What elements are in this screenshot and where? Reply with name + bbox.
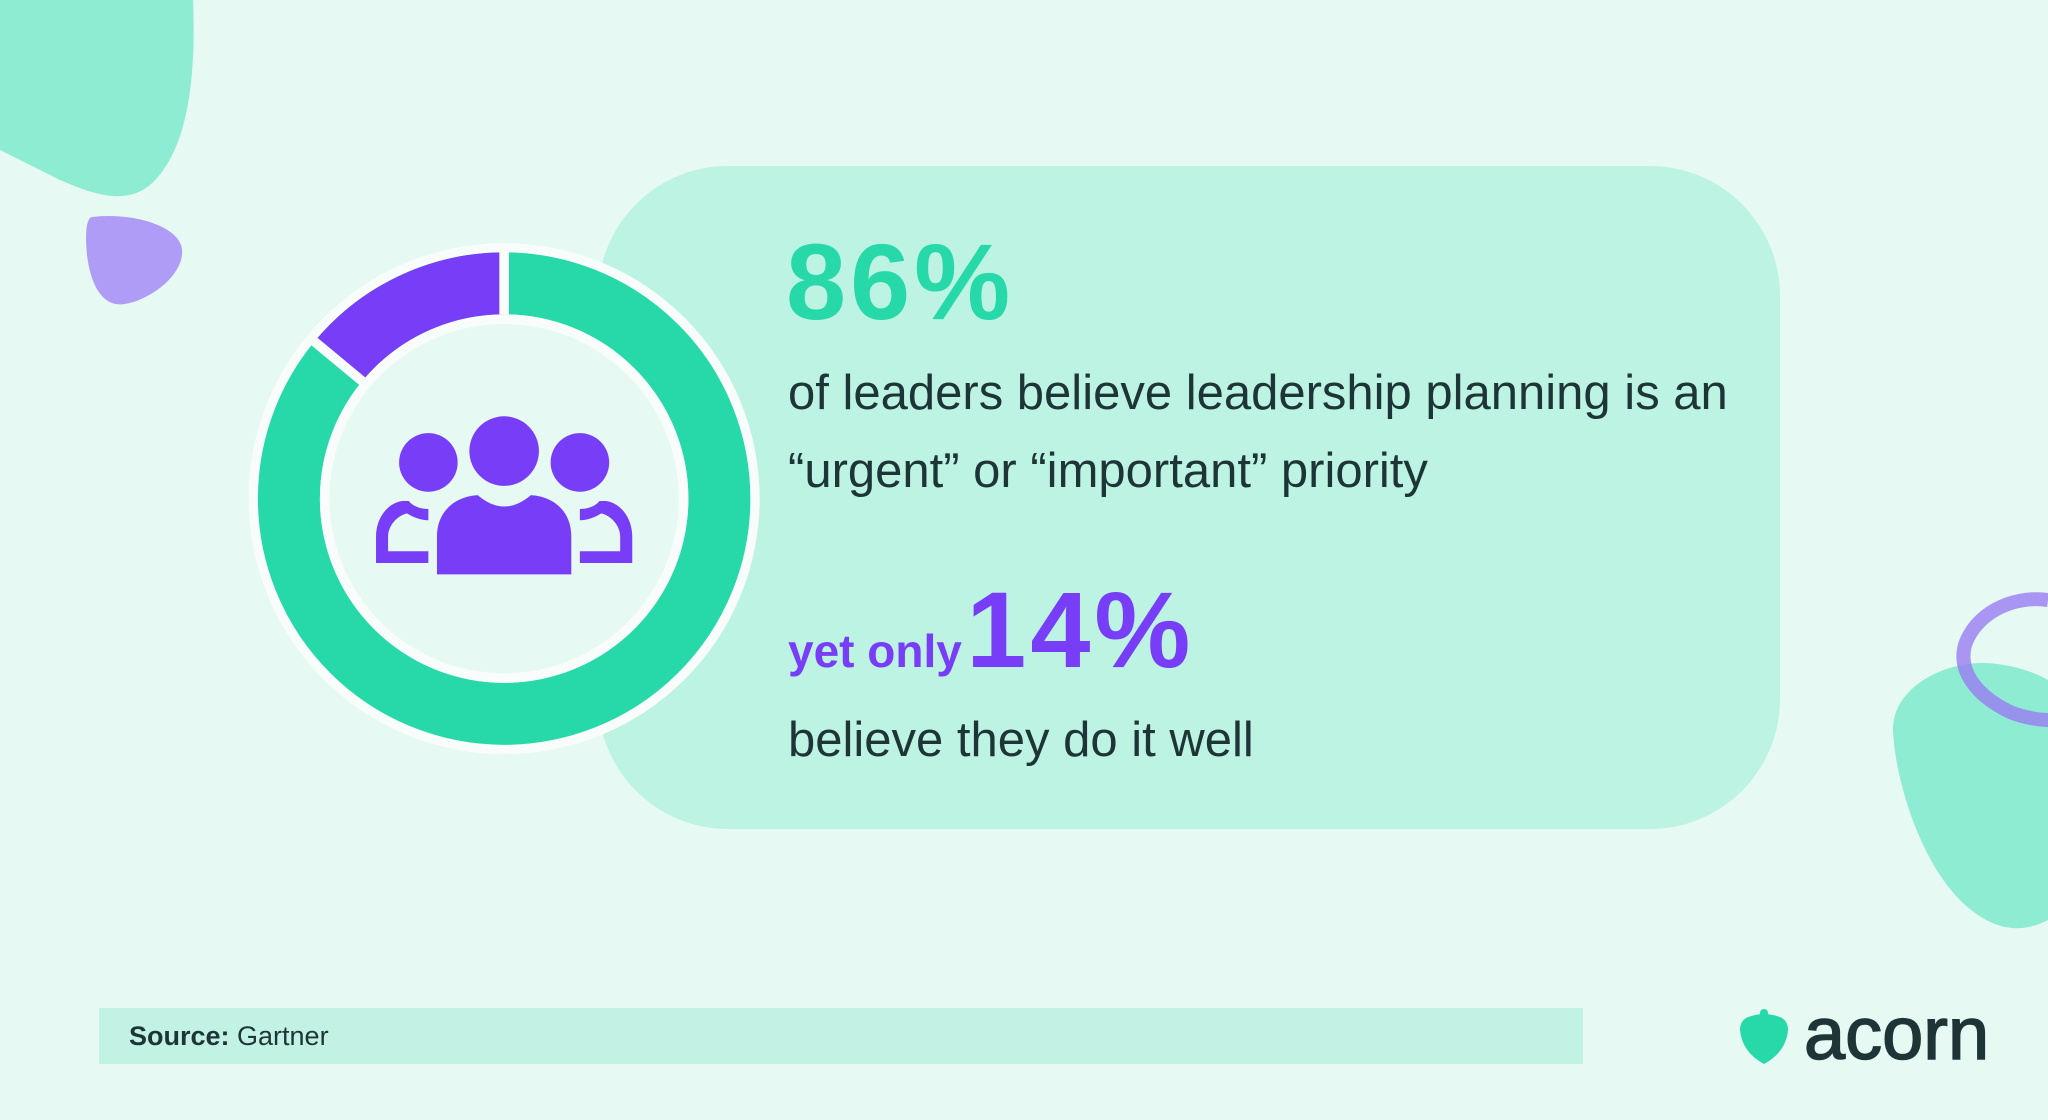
text: acorn: acorn bbox=[1804, 992, 1989, 1075]
logo: acorn bbox=[1740, 992, 1989, 1075]
blob: right green bbox=[1893, 663, 2048, 928]
donut chart bbox=[248, 243, 760, 754]
stat: yet only 14%: yet only 14% bbox=[788, 569, 1194, 690]
blob: top-left green bbox=[0, 0, 194, 196]
text: 14% description: believe they do it well bbox=[788, 713, 1254, 767]
text: 86% description: “urgent” or “important” priority bbox=[788, 444, 1428, 498]
source bar bbox=[99, 1008, 1583, 1064]
blob: purple bbox=[86, 216, 182, 304]
stat: 86%: 86% bbox=[786, 221, 1014, 342]
text: 86% description bbox=[788, 366, 1728, 498]
panel: stats card bbox=[598, 166, 1780, 829]
icon: people group bbox=[376, 416, 632, 574]
source bar: Source: Gartner bbox=[129, 1021, 329, 1051]
blob: right purple ring bbox=[1963, 599, 2048, 720]
text: 86% description: of leaders believe leadership planning is an bbox=[788, 366, 1728, 420]
icon: acorn bbox=[1740, 1009, 1788, 1064]
